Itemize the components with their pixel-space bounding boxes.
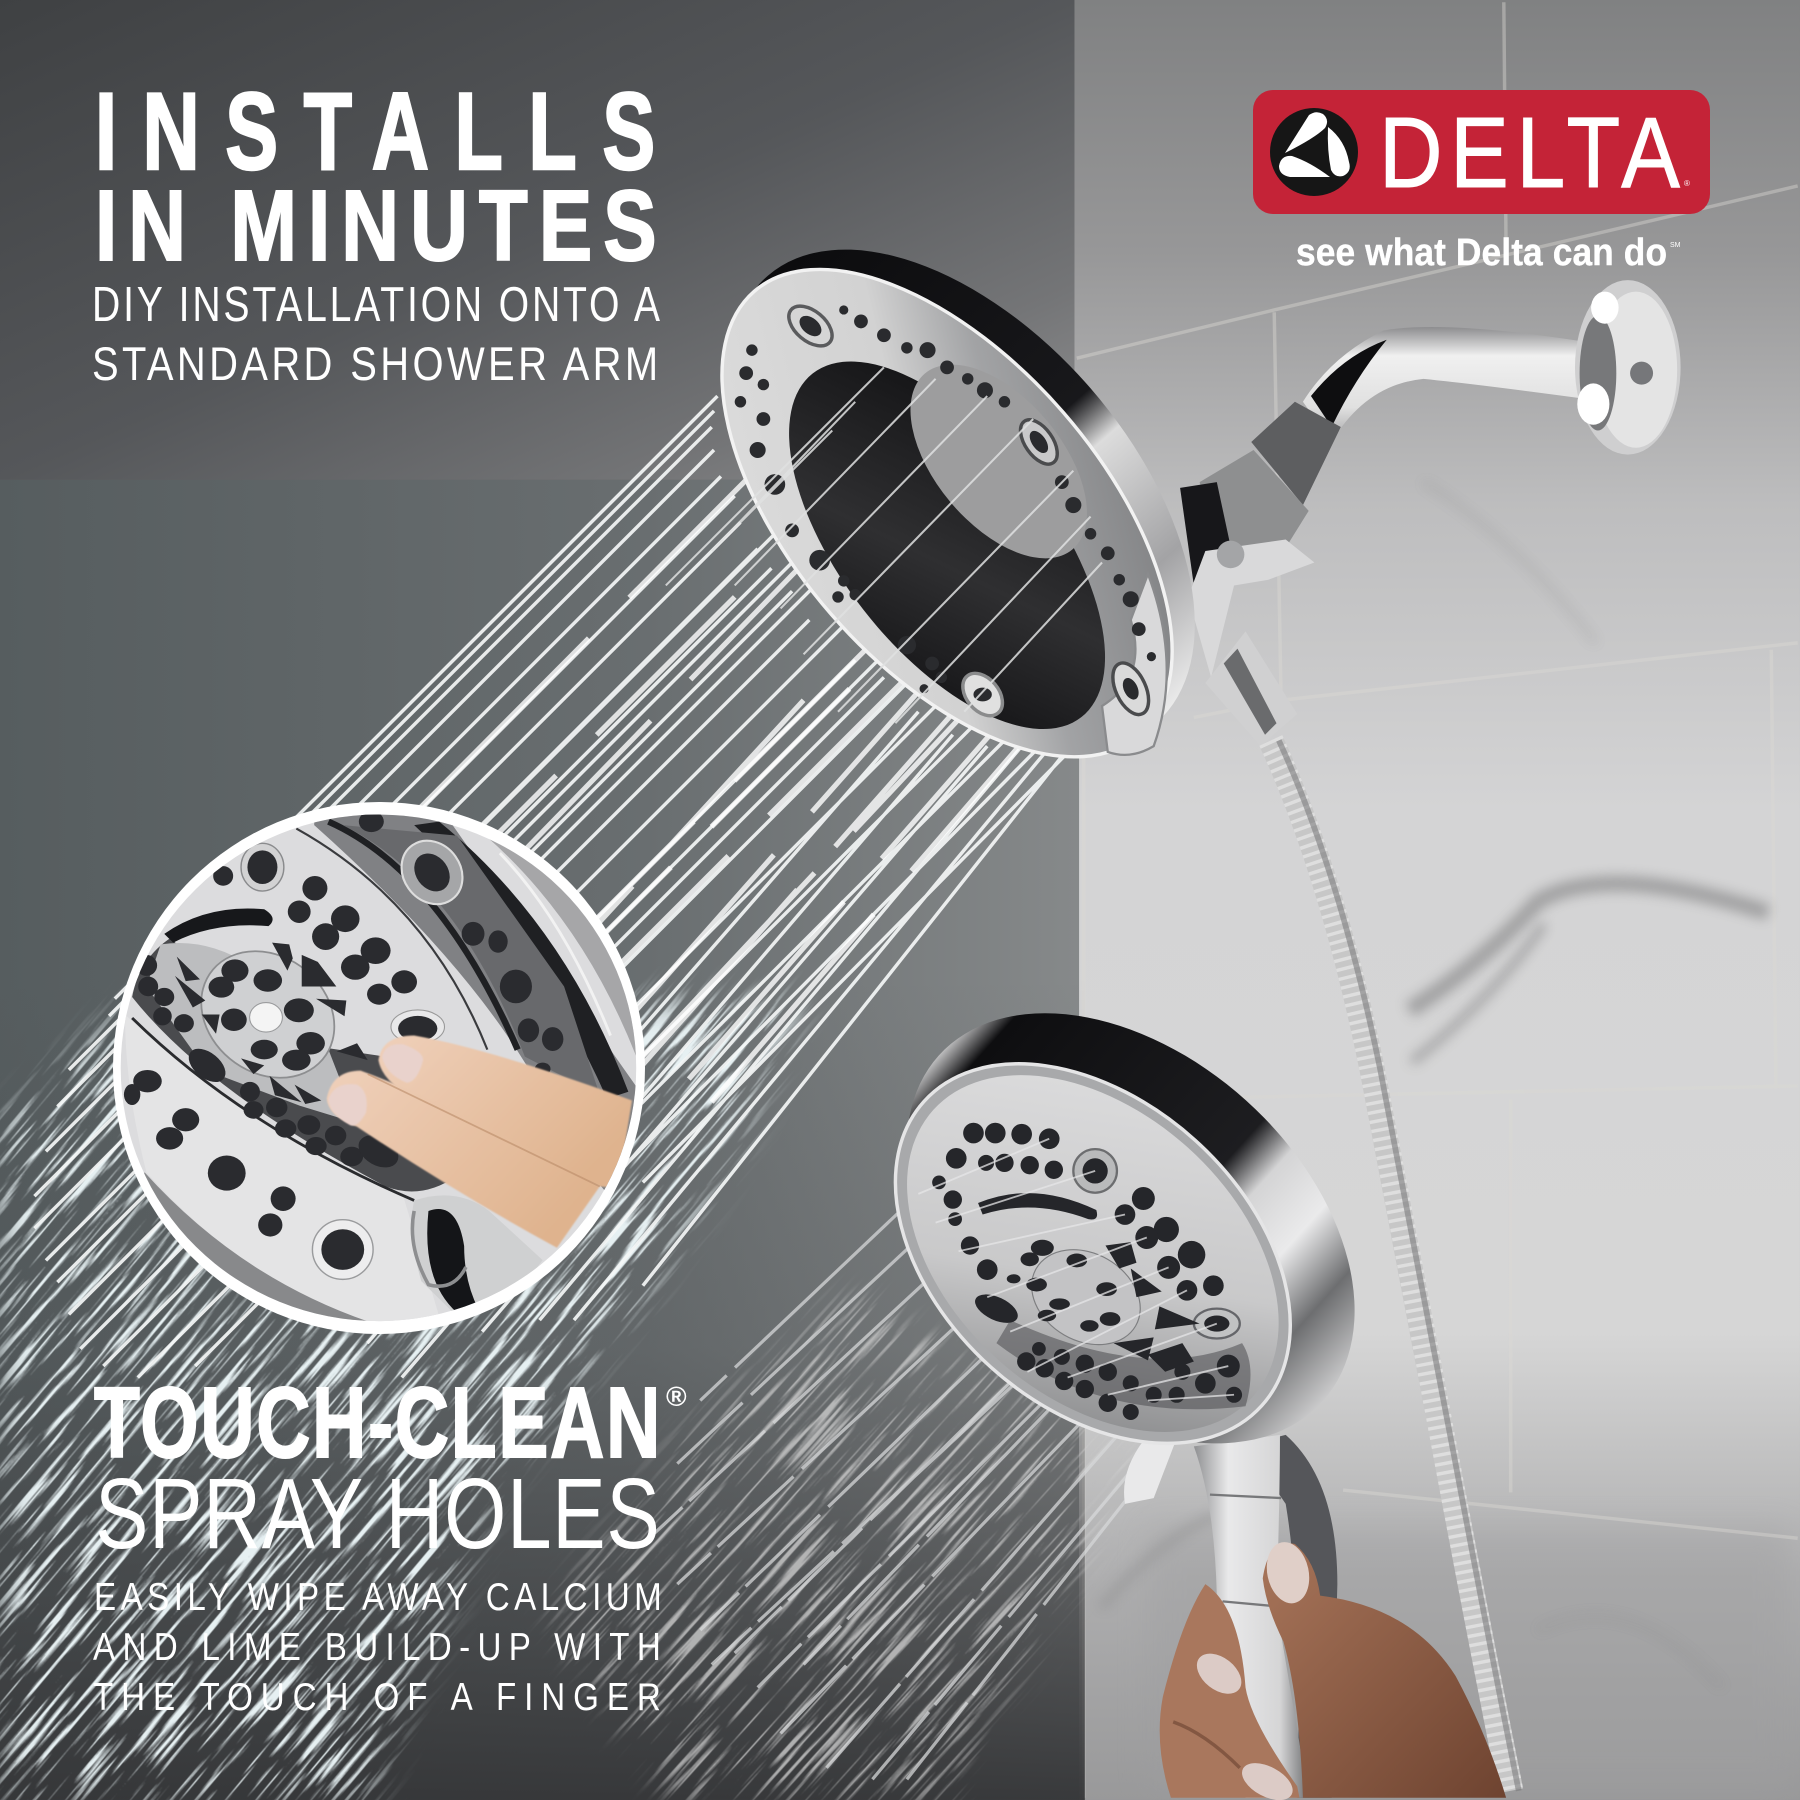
logo wordmark: DELTA: [1379, 97, 1680, 208]
see-through opening: [877, 333, 1121, 590]
face ring: [638, 190, 1256, 836]
hose: [1271, 740, 1519, 1791]
inset circle: finger wiping spray holes: [100, 790, 660, 1340]
heading: installs in minutes: [95, 70, 657, 282]
rim: [639, 164, 1285, 834]
heading: touch-clean spray holes: ®: [666, 1381, 687, 1412]
heading: touch-clean spray holes: [94, 1366, 687, 1570]
heading: installs in minutes: INSTALLS: [95, 70, 655, 193]
text: DIY installation: [92, 278, 660, 391]
text: easily wipe away: EASILY WIPE AWAY CALCIUM: [94, 1574, 662, 1619]
tagline: SM: [1670, 242, 1681, 249]
center disc: [200, 950, 336, 1079]
spray from the hand shower: [537, 1212, 1126, 1800]
nails: [382, 1044, 423, 1083]
text: DIY installation: DIY INSTALLATION ONTO A: [92, 278, 660, 332]
tagline: see what Delta can do: [1296, 231, 1667, 273]
outer chrome rim: [824, 928, 1438, 1529]
finger: upper: [378, 1036, 632, 1188]
white ring: [113, 802, 645, 1334]
connector nuts and bracket: [1180, 402, 1341, 746]
logo: Delta badge: [1253, 90, 1710, 214]
bezel: [822, 988, 1364, 1519]
handle: [1124, 1423, 1337, 1798]
water spray from the rain shower head: [0, 395, 1065, 1800]
text: easily wipe away: [93, 1574, 662, 1719]
heading: installs in minutes: IN MINUTES: [95, 171, 657, 282]
handle below: [412, 1195, 543, 1316]
logo mark: triangle in circle: [1270, 108, 1358, 196]
spray nozzles: [932, 1123, 1242, 1420]
hand: [1160, 1538, 1506, 1800]
heading: touch-clean spray holes: SPRAY HOLES: [95, 1459, 660, 1570]
text: easily wipe away: THE TOUCH OF A FINGER: [93, 1674, 661, 1719]
mounting arm and flange: [1303, 280, 1681, 455]
rain shower head: [638, 164, 1681, 1791]
finger: lower: [327, 1071, 600, 1248]
center disc: [1014, 1231, 1157, 1364]
text: easily wipe away: AND LIME BUILD-UP WITH: [93, 1624, 661, 1669]
water lines over the shower head opening: [666, 367, 1102, 723]
spray holes: [735, 298, 1156, 723]
lower grey edge: [139, 1172, 378, 1325]
heading: touch-clean spray holes: TOUCH-CLEAN: [94, 1366, 660, 1478]
hand shower: [822, 928, 1506, 1800]
lower chrome strip: [125, 1015, 439, 1323]
inner chrome recess band: [132, 937, 457, 1192]
slot: [164, 908, 273, 943]
outer rim band: [314, 814, 636, 1190]
spray holes: [124, 811, 563, 1279]
dark lower band: [996, 1320, 1251, 1409]
text: DIY installation: STANDARD SHOWER ARM: [92, 339, 658, 391]
spray face: [838, 1004, 1348, 1503]
water lines over hand shower face: [918, 1139, 1234, 1400]
bottom lip: [1102, 574, 1167, 755]
registered mark: ®: [1684, 179, 1690, 188]
inner dark cylinder: [730, 308, 1165, 782]
